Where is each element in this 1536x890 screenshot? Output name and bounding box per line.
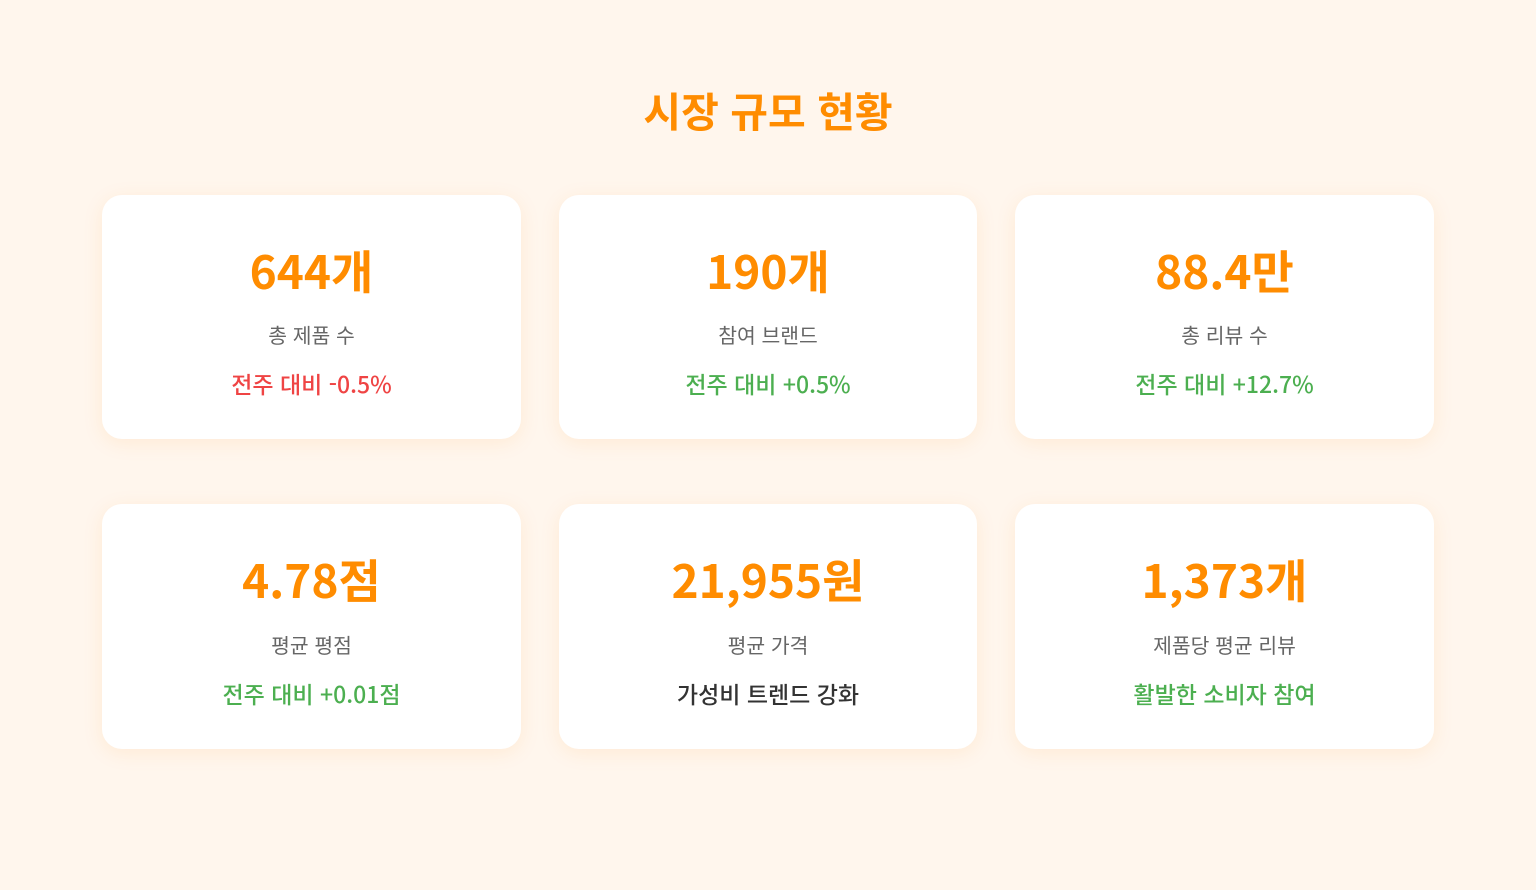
panel: reviews per product: [1015, 504, 1434, 749]
value: reviews: 88.4만: [1155, 237, 1294, 303]
label: total products: 총 제품 수: [268, 319, 355, 349]
value: reviews per product: 1,373개: [1142, 546, 1307, 612]
title: 시장 규모 현황: [643, 79, 893, 139]
panel: brands: [559, 195, 977, 439]
label: reviews: 총 리뷰 수: [1181, 319, 1268, 349]
label: reviews per product: 제품당 평균 리뷰: [1153, 629, 1296, 659]
change: reviews: 전주 대비 +12.7%: [1135, 366, 1314, 400]
value: brands: 190개: [706, 237, 830, 303]
change: brands: 전주 대비 +0.5%: [685, 366, 851, 400]
value: rating: 4.78점: [242, 546, 381, 612]
change: total products: 전주 대비 -0.5%: [231, 366, 392, 400]
label: price: 평균 가격: [728, 629, 808, 659]
panel: price: [559, 504, 977, 749]
change: rating: 전주 대비 +0.01점: [222, 676, 400, 710]
value: price: 21,955원: [671, 546, 865, 612]
panel: total products: [102, 195, 521, 439]
note: price: 가성비 트렌드 강화: [677, 676, 859, 710]
note: reviews per product: 활발한 소비자 참여: [1133, 676, 1316, 710]
label: brands: 참여 브랜드: [718, 319, 818, 349]
panel: rating: [102, 504, 521, 749]
panel: reviews: [1015, 195, 1434, 439]
value: total products: 644개: [250, 237, 373, 303]
label: rating: 평균 평점: [271, 629, 352, 659]
